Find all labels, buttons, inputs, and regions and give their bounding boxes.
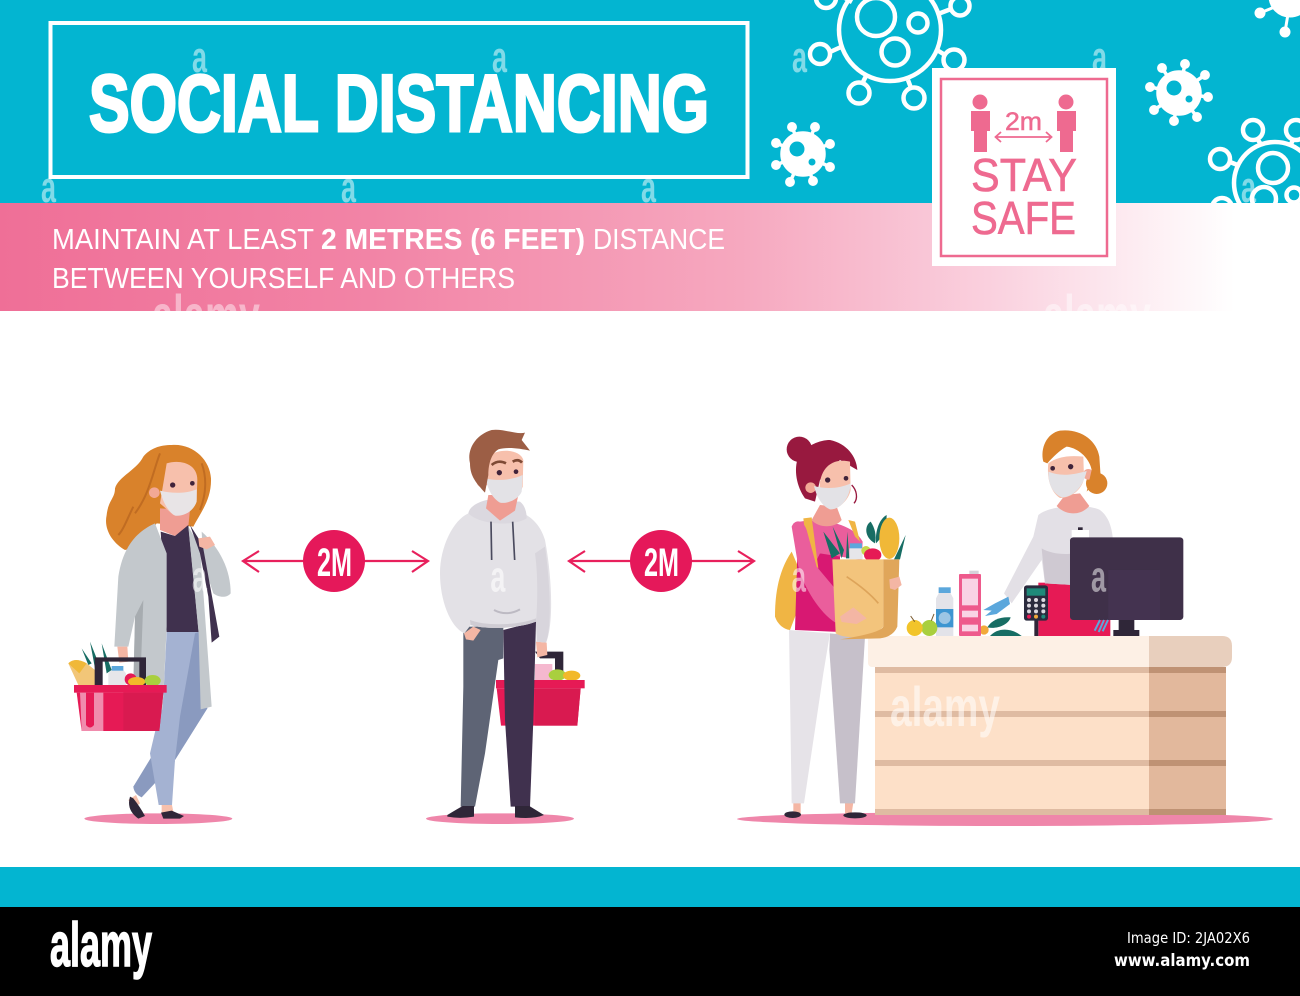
instruction text: 2 METRES (6 FEET): [321, 224, 585, 256]
figure: man with basket: [426, 430, 585, 824]
band watermark: alamy: [152, 283, 260, 346]
hoodie: [440, 495, 551, 643]
watermark: a: [490, 553, 506, 602]
floor shadow: counter scene: [737, 812, 1273, 826]
icon: small solid virus right: [1147, 61, 1211, 124]
hands: [464, 627, 547, 657]
watermark: a: [192, 553, 207, 602]
website: www.alamy.com: [1114, 951, 1250, 971]
counter top: [868, 636, 1153, 667]
neck: [812, 505, 842, 526]
basket with groceries: [496, 652, 585, 726]
watermark letters: a: [792, 33, 807, 82]
footer credit bar: [0, 907, 1300, 996]
face: [149, 462, 197, 516]
icon: two people 2m apart: [971, 94, 1076, 152]
band watermark: alamy: [1043, 283, 1151, 346]
arrow: first 2 metre distance: [243, 530, 428, 592]
figure: woman with grocery bag: [775, 437, 906, 818]
basket with groceries: [68, 642, 167, 731]
legs: [784, 630, 867, 818]
neck: [1057, 493, 1089, 513]
hand on strap: [198, 537, 215, 549]
arrow: first 2 metre distance: 2M: [317, 541, 352, 585]
top: [161, 525, 199, 632]
watermark letters: a: [341, 163, 356, 212]
watermark letters: a: [1092, 33, 1107, 82]
arrow: second 2 metre distance: [569, 530, 754, 592]
bottom teal bar: [0, 867, 1300, 907]
head: [469, 430, 530, 503]
watermark letters: a: [192, 33, 207, 82]
watermark letters: a: [641, 163, 656, 212]
sign: stay safe: [932, 68, 1116, 266]
monitor: [1070, 537, 1183, 636]
cardigan: [114, 523, 231, 710]
hands: [840, 577, 902, 624]
head: [1042, 430, 1107, 498]
watermark letters: a: [41, 163, 56, 212]
torso and arm: [983, 506, 1113, 616]
figure: woman with basket: [68, 445, 232, 824]
watermark: a: [792, 553, 806, 602]
arrow: second 2 metre distance: 2M: [644, 541, 679, 585]
sign text: STAY: [971, 149, 1077, 201]
hair: [106, 445, 211, 550]
sign text: [971, 149, 1077, 244]
sign text: SAFE: [971, 192, 1076, 244]
watermark letters: a: [492, 33, 507, 82]
icon: small solid virus left: [773, 124, 833, 185]
shoulder bag: [190, 525, 219, 643]
legs: [128, 632, 207, 819]
hand on basket: [117, 647, 128, 663]
name badge: [1072, 527, 1089, 538]
instruction text: DISTANCE: [593, 224, 725, 256]
groceries in bag: [823, 515, 906, 562]
watermark letters: [41, 33, 1256, 212]
footer logo: alamy: [50, 911, 152, 980]
watermark letters: a: [1241, 163, 1256, 212]
title: SOCIAL DISTANCING: [89, 59, 709, 149]
head: [787, 437, 857, 509]
icon: large outlined virus: [810, 0, 970, 108]
goods on counter: [907, 571, 1022, 636]
icon: two people 2m apart: 2m: [1005, 108, 1042, 136]
paper bag: [832, 559, 899, 639]
counter watermark: alamy: [890, 675, 1000, 738]
instruction text: [52, 224, 725, 295]
title box: [50, 23, 748, 177]
band watermark: [152, 283, 1151, 346]
instruction text: BETWEEN YOURSELF AND OTHERS: [52, 263, 515, 295]
backpack: [775, 552, 807, 630]
figure: cashier: [907, 430, 1183, 637]
icon: outlined virus lower right: [1210, 120, 1300, 224]
shoes: [447, 806, 544, 818]
icon: solid virus top right: [1256, 0, 1300, 36]
monitor: a: [1091, 553, 1106, 602]
shirt: [792, 517, 863, 632]
pink instruction band: [0, 203, 1300, 346]
checkout counter: [868, 636, 1232, 815]
trousers: [461, 622, 536, 807]
skirt: [1038, 583, 1110, 637]
counter stripes: [875, 667, 1226, 815]
card reader: [1024, 585, 1048, 636]
image id: Image ID: 2JA02X6: [1127, 929, 1250, 947]
neck: [160, 508, 190, 536]
instruction text: MAINTAIN AT LEAST: [52, 224, 314, 256]
header panel: [0, 0, 1300, 224]
